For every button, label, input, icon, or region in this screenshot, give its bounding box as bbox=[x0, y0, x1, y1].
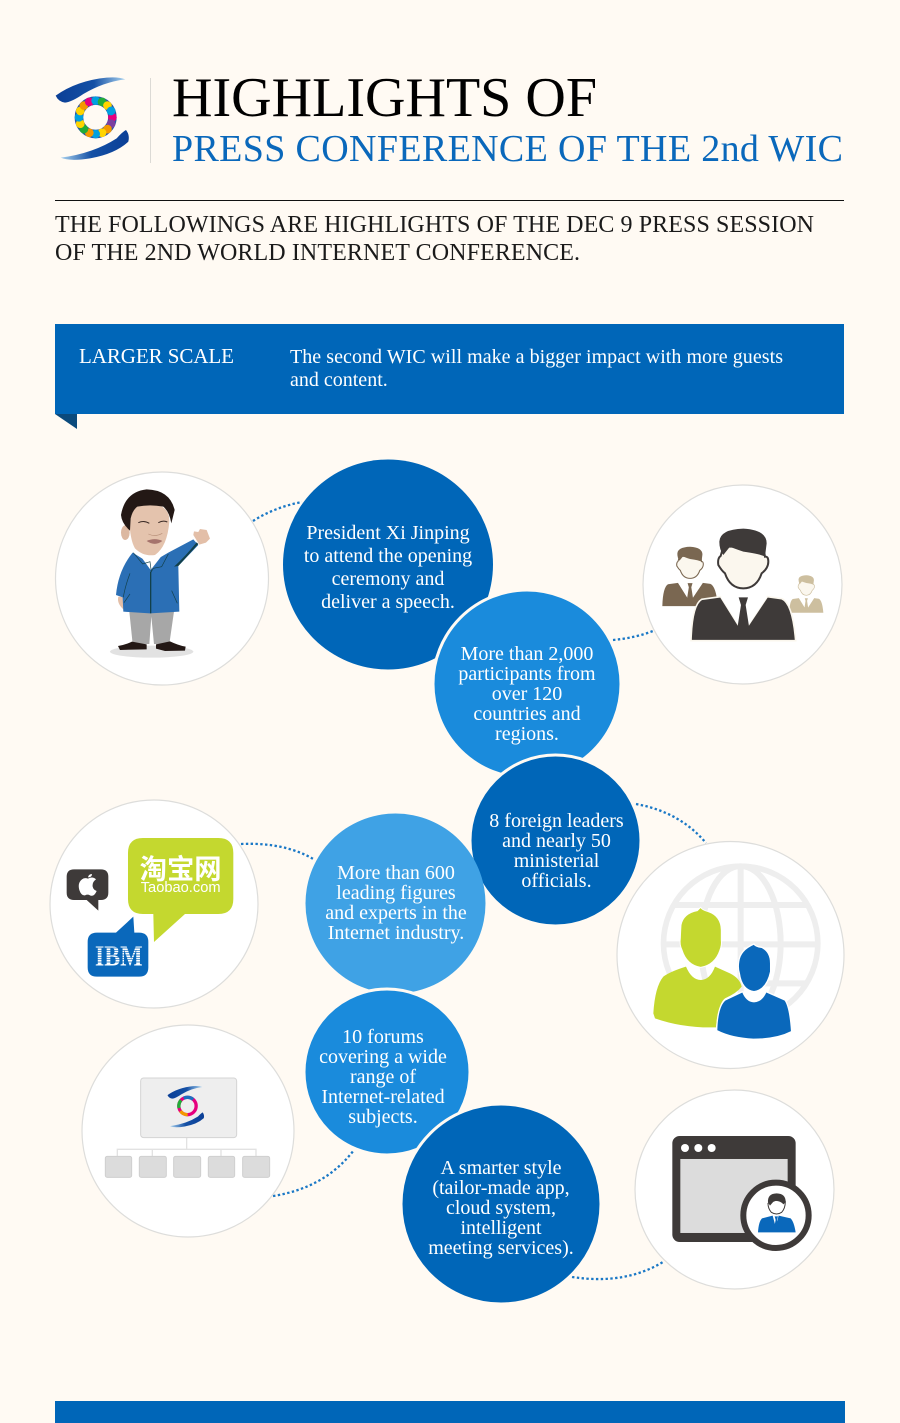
icon: large man centre bbox=[691, 529, 796, 641]
circle: foreign leaders: and nearly 50 bbox=[502, 830, 611, 852]
circle: leading figures: and experts in the bbox=[325, 902, 467, 924]
icon: browser window bbox=[672, 1136, 796, 1242]
intro text: THE FOLLOWINGS ARE HIGHLIGHTS OF THE DEC 9 PRESS SESSION bbox=[55, 212, 814, 238]
circle: president: ceremony and bbox=[332, 568, 444, 590]
circle: president: President Xi Jinping bbox=[306, 522, 470, 544]
icon: small man right bbox=[789, 575, 823, 613]
circle: smarter style: meeting services). bbox=[428, 1237, 574, 1259]
circle: participants: More than 2,000 bbox=[461, 643, 593, 665]
circle: smarter style: intelligent bbox=[460, 1217, 542, 1239]
circle: smarter style: A smarter style bbox=[440, 1157, 562, 1179]
icon: org chart bbox=[105, 1078, 270, 1177]
panel: foreign leaders illustration bbox=[617, 842, 844, 1068]
circle: president bbox=[283, 460, 493, 670]
icon: apple speech bubble bbox=[67, 869, 108, 911]
circle: participants: participants from bbox=[458, 663, 596, 685]
circle: participants: over 120 bbox=[492, 683, 562, 705]
circle: forums: range of bbox=[350, 1066, 416, 1088]
circle: leading figures: More than 600 bbox=[337, 862, 455, 884]
icon: blue person bbox=[738, 944, 771, 992]
panel: forums illustration bbox=[82, 1025, 294, 1237]
panel: company logos illustration bbox=[50, 800, 258, 1008]
title: PRESS CONFERENCE OF THE 2nd WIC bbox=[172, 128, 843, 170]
circle: smarter style: (tailor-made app, bbox=[432, 1177, 570, 1199]
dotted connector lines bbox=[241, 502, 706, 1279]
icon: mini logo bbox=[167, 1086, 204, 1127]
circle: forums: 10 forums bbox=[342, 1026, 424, 1048]
circle: leading figures: Internet industry. bbox=[328, 922, 464, 944]
icon: globe bbox=[663, 866, 818, 1021]
title: HIGHLIGHTS OF bbox=[172, 67, 597, 129]
rule under title bbox=[55, 200, 844, 201]
circle: leading figures bbox=[306, 814, 486, 994]
circle: foreign leaders: ministerial bbox=[514, 850, 600, 872]
circle: foreign leaders: officials. bbox=[521, 870, 592, 892]
banner: larger scale: and content. bbox=[290, 369, 388, 391]
icon: small man left bbox=[662, 547, 718, 606]
circle: foreign leaders bbox=[470, 755, 641, 926]
circle: participants: regions. bbox=[495, 723, 559, 745]
circle: participants: countries and bbox=[473, 703, 581, 725]
panel: smart services illustration bbox=[635, 1090, 834, 1289]
circle: president: to attend the opening bbox=[304, 545, 472, 567]
circle: forums bbox=[304, 989, 470, 1155]
circle: forums: covering a wide bbox=[319, 1046, 447, 1068]
banner: larger scale: LARGER SCALE bbox=[79, 344, 234, 368]
circle: forums: subjects. bbox=[348, 1106, 418, 1128]
circle: smarter style bbox=[401, 1104, 601, 1304]
circle: leading figures: leading figures bbox=[336, 882, 456, 904]
icon: taobao speech bubble bbox=[128, 838, 233, 942]
banner: larger scale: The second WIC will make a bigger impact with more guests bbox=[290, 346, 783, 368]
icon: user badge bbox=[743, 1183, 809, 1248]
intro text bbox=[55, 212, 814, 266]
circle: participants bbox=[433, 590, 621, 778]
icon: ibm speech bubble bbox=[88, 917, 148, 977]
header divider bbox=[150, 78, 151, 163]
title bbox=[172, 67, 843, 170]
icon: ibm speech bubble: IBM bbox=[95, 940, 143, 972]
icon: taobao speech bubble: 淘宝网 bbox=[140, 847, 222, 887]
footer bar bbox=[55, 1401, 845, 1423]
circle: president: deliver a speech. bbox=[321, 591, 455, 613]
circle: forums: Internet-related bbox=[321, 1086, 445, 1108]
panel: participants illustration bbox=[643, 485, 842, 684]
circle: smarter style: cloud system, bbox=[446, 1197, 556, 1219]
circle: foreign leaders: 8 foreign leaders bbox=[489, 810, 624, 832]
panel: president illustration bbox=[56, 472, 268, 685]
icon: green person bbox=[680, 907, 721, 967]
intro text: OF THE 2ND WORLD INTERNET CONFERENCE. bbox=[55, 240, 580, 266]
logo bbox=[56, 77, 129, 160]
banner: larger scale bbox=[55, 324, 844, 429]
icon: taobao speech bubble: Taobao.com bbox=[141, 880, 221, 896]
